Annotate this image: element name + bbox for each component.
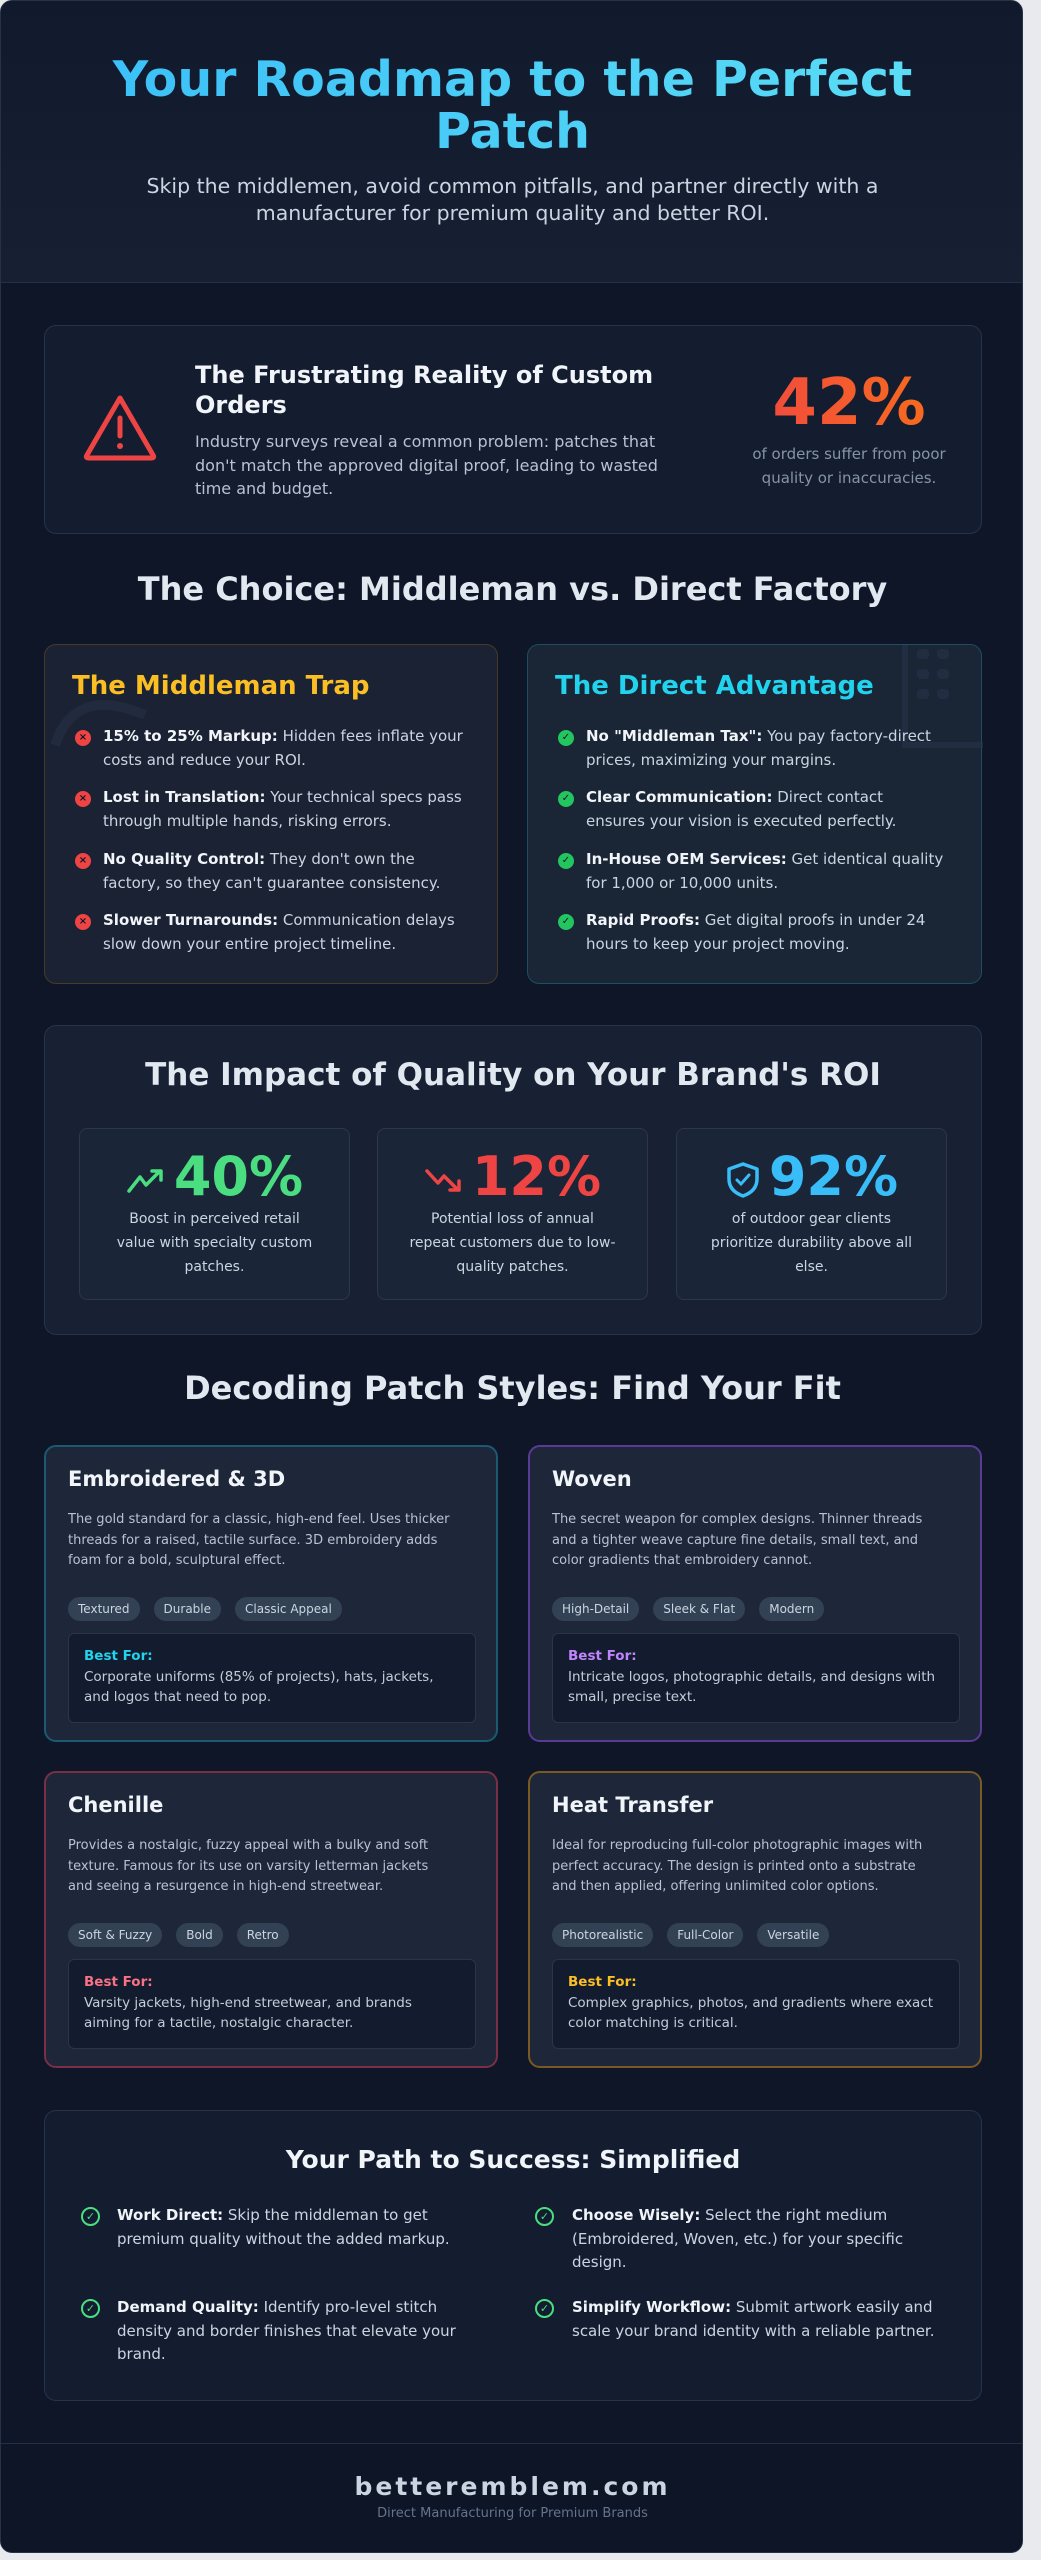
stat: 12%: repeat customers due to low- [409, 1235, 616, 1251]
decorative icon: factory watermark [902, 645, 983, 748]
card: heat transfer: color matching is critical. [568, 2015, 738, 2031]
panel: middleman trap [44, 644, 498, 984]
list: middleman issues: × [79, 855, 87, 866]
heading: The Frustrating Reality of Custom [195, 361, 653, 389]
subtitle: Skip the middlemen, avoid common pitfalls, and partner directly with a [147, 174, 878, 198]
footer [1, 2443, 1024, 2554]
stat: 92%: prioritize durability above all [711, 1235, 912, 1251]
list: middleman issues: × [79, 732, 87, 743]
stat: 40%: Boost in perceived retail [129, 1211, 300, 1227]
body text: don't match the approved digital proof, leading to wasted [195, 456, 658, 474]
heading: decoding patch styles: Decoding Patch Styles: Find Your Fit [184, 1369, 841, 1407]
heading: The Impact of Quality on Your Brand's ROI [145, 1057, 881, 1093]
list: steps: ✓ [540, 2210, 549, 2223]
list: direct benefits: In-House OEM Services: Get identical quality [586, 850, 943, 868]
list: steps: Choose Wisely: Select the right medium [572, 2206, 887, 2224]
stat: 12%: Potential loss of annual [431, 1211, 594, 1227]
title: Patch [435, 103, 590, 160]
list: steps: Simplify Workflow: Submit artwork easily and [572, 2298, 933, 2316]
card: chenille: Soft & Fuzzy [78, 1928, 152, 1942]
list: middleman issues: Slower Turnarounds: Communication delays [103, 911, 455, 929]
list: direct benefits: ensures your vision is executed perfectly. [586, 812, 896, 830]
list: middleman issues: × [79, 916, 87, 927]
subtitle [147, 174, 878, 225]
stat: 12%: 12% [472, 1145, 601, 1208]
list: middleman issues: slow down your entire project timeline. [103, 935, 396, 953]
card: chenille: Retro [247, 1928, 279, 1942]
list: middleman issues: × [79, 793, 87, 804]
list: steps: ✓ [86, 2302, 95, 2315]
list: direct benefits: ✓ [562, 916, 570, 927]
heading: Your Path to Success: Simplified [286, 2145, 740, 2174]
card: heat transfer: Best For: [568, 1974, 637, 1990]
card: embroidered: The gold standard for a classic, high-end feel. Uses thicker [68, 1512, 450, 1527]
card: embroidered: and logos that need to pop. [84, 1689, 271, 1705]
stat: 92%: else. [795, 1259, 828, 1275]
card: chenille: Varsity jackets, high-end streetwear, and brands [84, 1994, 412, 2010]
card: woven: Best For: [568, 1648, 637, 1664]
card: heat transfer [528, 1771, 982, 2068]
list: steps: (Embroidered, Woven, etc.) for your specific [572, 2230, 903, 2248]
card: embroidered: Corporate uniforms (85% of projects), hats, jackets, [84, 1668, 434, 1684]
card: embroidered [44, 1445, 498, 1742]
card: chenille: Bold [186, 1928, 213, 1942]
list: steps: Demand Quality: Identify pro-level stitch [117, 2298, 437, 2316]
stat: 92% [676, 1128, 947, 1300]
stat: 12%: quality patches. [456, 1259, 569, 1275]
card: woven: Intricate logos, photographic details, and designs with [568, 1668, 935, 1684]
card: woven: and a tighter weave capture fine details, small text, and [552, 1532, 918, 1548]
list: direct benefits: ✓ [562, 732, 570, 743]
card: heat transfer: perfect accuracy. The design is printed onto a substrate [552, 1858, 916, 1874]
list: steps [81, 2206, 934, 2363]
list: direct benefits: prices, maximizing your margins. [586, 751, 836, 769]
panel: frustrating reality [44, 325, 982, 534]
list: middleman issues [75, 727, 463, 953]
card: chenille [44, 1771, 498, 2068]
list: steps: ✓ [86, 2210, 95, 2223]
list: direct benefits: Rapid Proofs: Get digital proofs in under 24 [586, 911, 925, 929]
stat: 42%: of orders suffer from poor [752, 445, 946, 463]
card: embroidered: Best For: [84, 1648, 153, 1664]
stat: 42%: 42% [772, 366, 926, 440]
title [1, 54, 1024, 158]
panel: impact of quality [44, 1025, 982, 1335]
heading: the choice: The Choice: Middleman vs. Direct Factory [138, 570, 887, 608]
list: steps: design. [572, 2253, 627, 2271]
header [1, 1, 1024, 283]
body text: Industry surveys reveal a common problem: patches that [195, 432, 655, 451]
card: woven: color gradients that embroidery cannot. [552, 1553, 812, 1568]
card: chenille: Provides a nostalgic, fuzzy appeal with a bulky and soft [68, 1838, 428, 1853]
list: steps: density and border finishes that elevate your [117, 2322, 456, 2340]
card: woven: small, precise text. [568, 1689, 696, 1705]
card: heat transfer: Complex graphics, photos, and gradients where exact [568, 1994, 933, 2010]
card: embroidered: Embroidered & 3D [68, 1467, 285, 1491]
card: woven: High-Detail [562, 1602, 629, 1616]
card: embroidered: Durable [164, 1602, 211, 1616]
list: direct benefits: hours to keep your project moving. [586, 935, 850, 953]
subtitle: manufacturer for premium quality and better ROI. [256, 201, 769, 225]
list: steps: Work Direct: Skip the middleman to get [117, 2206, 428, 2224]
card: woven: Modern [769, 1602, 814, 1616]
decorative icon: watermark arc [50, 700, 146, 746]
card: chenille: and seeing a resurgence in high-end streetwear. [68, 1879, 383, 1894]
card: heat transfer: Photorealistic [562, 1928, 643, 1942]
stat: 40%: 40% [174, 1145, 303, 1208]
title: Your Roadmap to the Perfect [113, 51, 912, 108]
list: steps: premium quality without the added markup. [117, 2230, 450, 2248]
list: direct benefits: Clear Communication: Direct contact [586, 788, 883, 806]
list: middleman issues: Lost in Translation: Your technical specs pass [103, 788, 462, 806]
card: embroidered: Classic Appeal [245, 1602, 332, 1616]
card: embroidered: foam for a bold, sculptural effect. [68, 1553, 285, 1568]
list: steps: ✓ [540, 2302, 549, 2315]
card: chenille: aiming for a tactile, nostalgic character. [84, 2015, 353, 2031]
list: middleman issues: factory, so they can't guarantee consistency. [103, 874, 440, 892]
list: middleman issues: No Quality Control: They don't own the [103, 850, 415, 868]
card: heat transfer: Ideal for reproducing full-color photographic images with [552, 1838, 922, 1853]
list: direct benefits: for 1,000 or 10,000 units. [586, 874, 778, 892]
list: direct benefits: No "Middleman Tax": You pay factory-direct [586, 727, 931, 745]
stat: 92%: 92% [769, 1145, 898, 1208]
body text [195, 432, 658, 498]
panel: path to success [44, 2110, 982, 2401]
card: woven: The secret weapon for complex designs. Thinner threads [552, 1512, 922, 1527]
list: steps: brand. [117, 2345, 166, 2363]
list: steps: scale your brand identity with a reliable partner. [572, 2322, 934, 2340]
card: chenille: texture. Famous for its use on varsity letterman jackets [68, 1858, 428, 1874]
card: woven [528, 1445, 982, 1742]
stat: 40%: value with specialty custom [117, 1235, 312, 1251]
card: heat transfer: Heat Transfer [552, 1793, 713, 1817]
panel: direct advantage [527, 644, 982, 984]
list: direct benefits: ✓ [562, 855, 570, 866]
card: embroidered: Textured [78, 1602, 130, 1616]
card: heat transfer: Versatile [767, 1928, 819, 1942]
heading [195, 361, 653, 419]
list: direct benefits [558, 727, 943, 953]
card: embroidered: threads for a raised, tactile surface. 3D embroidery adds [68, 1532, 437, 1548]
title: The Middleman Trap [72, 671, 370, 701]
card: woven: Woven [552, 1467, 632, 1491]
body text: time and budget. [195, 479, 333, 498]
stat: 42%: quality or inaccuracies. [762, 469, 936, 487]
list: direct benefits: ✓ [562, 793, 570, 804]
stat: 40%: patches. [185, 1259, 244, 1275]
list: middleman issues: 15% to 25% Markup: Hidden fees inflate your [103, 727, 463, 745]
card: woven: Sleek & Flat [663, 1602, 735, 1616]
stat: 42% [752, 366, 946, 487]
card: heat transfer: Full-Color [677, 1928, 733, 1942]
stat: 92%: of outdoor gear clients [732, 1211, 891, 1227]
brand: betteremblem.com [354, 2472, 671, 2501]
list: middleman issues: costs and reduce your ROI. [103, 751, 306, 769]
title: The Direct Advantage [555, 671, 874, 701]
card: chenille: Chenille [68, 1793, 163, 1817]
stat: 12% [377, 1128, 648, 1300]
card: chenille: Best For: [84, 1974, 153, 1990]
stat: 40% [79, 1128, 350, 1300]
card: heat transfer: and then applied, offering unlimited color options. [552, 1879, 879, 1894]
heading: Orders [195, 391, 287, 419]
list: middleman issues: through multiple hands, risking errors. [103, 812, 392, 830]
tagline: Direct Manufacturing for Premium Brands [377, 2506, 648, 2521]
icon: warning [84, 396, 156, 460]
